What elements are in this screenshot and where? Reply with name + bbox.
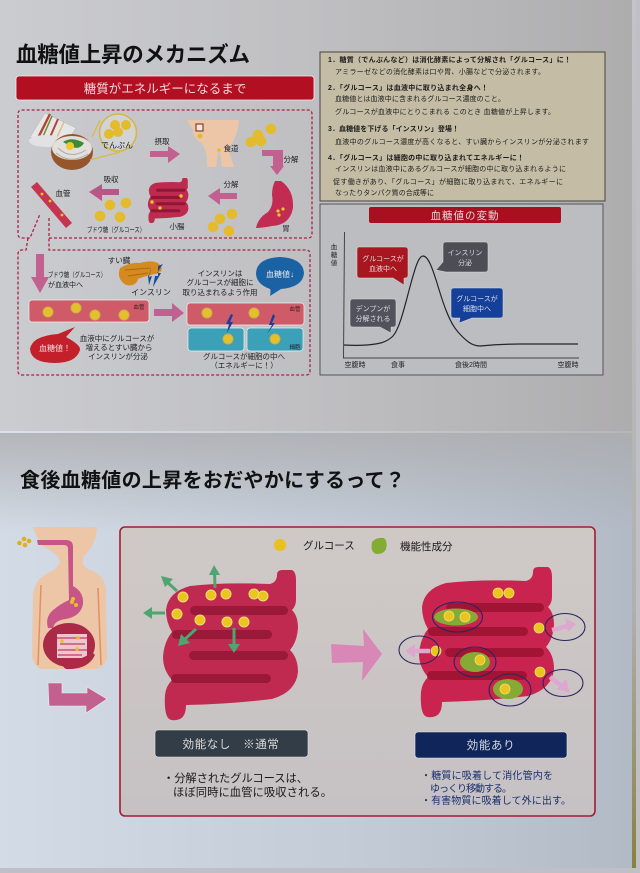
diagram: without effect bbox=[143, 565, 298, 720]
text: no effect description: ・分解されたグルコースは、 bbox=[163, 771, 308, 785]
text: insulin function: 取り込まれるよう作用 bbox=[182, 287, 258, 297]
blood vessel: right bbox=[187, 303, 304, 325]
text: insulin secretion: インスリンが分泌 bbox=[88, 351, 148, 361]
blood vessel: left: 血管 bbox=[133, 303, 145, 311]
legend bbox=[274, 538, 453, 554]
heading bar: sugar to energy bbox=[16, 76, 314, 100]
text: glucose enters cell: （エネルギーに！） bbox=[210, 361, 278, 370]
text: insulin function: インスリンは bbox=[198, 269, 243, 278]
icon: stomach bbox=[256, 181, 293, 233]
text: effect description: ・有害物質に吸着して外に出す。 bbox=[421, 794, 571, 807]
heading bar: sugar to energy: 糖質がエネルギーになるまで bbox=[84, 81, 246, 96]
legend: グルコース bbox=[303, 539, 355, 552]
panel: mechanism comparison bbox=[120, 527, 595, 816]
label: effective bbox=[415, 732, 567, 758]
x axis labels: 空腹時 bbox=[558, 360, 578, 369]
callout: blood sugar up bbox=[30, 327, 80, 363]
icon: body with digestive organs bbox=[32, 527, 107, 669]
text: effect description: ・糖質に吸着して消化管内を bbox=[421, 769, 553, 782]
pink excretion arrows bbox=[412, 626, 570, 688]
chart heading: 血糖値の変動 bbox=[430, 209, 500, 222]
callout: glucose into cells: 細胞中へ bbox=[463, 304, 491, 313]
callout: insulin secretion: 分泌 bbox=[458, 258, 472, 267]
label: glucose: ブドウ糖（グルコース） bbox=[87, 225, 145, 234]
callout: starch breakdown bbox=[350, 299, 396, 333]
label: effective: 効能あり bbox=[467, 738, 515, 752]
legend: 機能性成分 bbox=[400, 540, 453, 553]
text: no effect description: ほぼ同時に血管に吸収される。 bbox=[173, 785, 332, 799]
arrow: ingestion: 摂取 bbox=[154, 136, 170, 146]
x axis labels: 食事 bbox=[391, 360, 405, 369]
arrow: absorption bbox=[89, 175, 119, 201]
callout: glucose into blood bbox=[357, 247, 408, 285]
arrow: breakdown to small intestine: 分解 bbox=[224, 179, 239, 189]
icon: pancreas bbox=[108, 255, 171, 297]
panel: explanation text: 血液中のグルコース濃度が高くなると、すい臓からインスリンが分泌されます bbox=[335, 137, 589, 146]
text: insulin secretion bbox=[80, 333, 155, 361]
text: glucose enters blood: ブドウ糖（グルコース） bbox=[48, 270, 106, 279]
glucose dots bbox=[431, 588, 545, 694]
icon: small intestine: 小腸 bbox=[170, 222, 185, 231]
arrow: bent to main panel bbox=[48, 683, 107, 713]
arrow: comparison bbox=[331, 629, 382, 681]
blood vessel: right: 血管 bbox=[289, 305, 301, 313]
diagram: with effect bbox=[399, 567, 585, 717]
panel: explanation text: アミラーゼなどの消化酵素は口や胃、小腸などで分泌されます。 bbox=[335, 67, 545, 76]
panel: explanation text: 4．「グルコース」は細胞の中に取り込まれてエネルギーに！ bbox=[328, 153, 524, 162]
chart axes bbox=[344, 232, 579, 358]
text: glucose enters blood bbox=[48, 270, 106, 289]
panel: explanation text: 3．血糖値を下げる「インスリン」登場！ bbox=[328, 124, 459, 133]
glucose dots: starch bbox=[246, 124, 276, 147]
panel: insulin action bbox=[18, 238, 310, 375]
callout: insulin secretion bbox=[436, 242, 488, 272]
icon: pancreas: すい臓 bbox=[108, 255, 131, 265]
functional ingredient blobs bbox=[434, 608, 523, 699]
glucose dots: maltose bbox=[208, 209, 237, 236]
panel: explanation text: 2．「グルコース」は血液中に取り込まれ全身へ！ bbox=[328, 83, 488, 92]
icon: intestine left bbox=[163, 570, 298, 720]
x axis labels: 食後2時間 bbox=[455, 360, 487, 369]
text: insulin function: グルコースが細胞に bbox=[187, 277, 253, 287]
icon: blood vessel bbox=[31, 182, 72, 228]
icon: mouth and esophagus bbox=[187, 120, 239, 167]
text: glucose enters cell: グルコースが細胞の中へ bbox=[203, 351, 285, 361]
callout: glucose into cells bbox=[451, 288, 503, 323]
highlight ellipses bbox=[399, 602, 585, 706]
arrow: breakdown to stomach: 分解 bbox=[284, 154, 299, 164]
icon: starch circle bbox=[90, 114, 136, 160]
panel: explanation text bbox=[320, 52, 605, 201]
panel: explanation text: グルコースが血液中にとりこまれる このとき 血糖値が上昇します。 bbox=[335, 107, 555, 116]
icon: intestine right bbox=[419, 567, 554, 717]
icon: insulin bolts bbox=[226, 314, 275, 334]
section title: 食後血糖値の上昇をおだやかにするって？ bbox=[20, 469, 405, 492]
text: effect description bbox=[421, 769, 571, 807]
glucose dots bbox=[172, 589, 268, 627]
text: glucose enters blood: が血液中へ bbox=[48, 280, 83, 289]
callout: glucose into blood: グルコースが bbox=[362, 254, 404, 263]
arrow: to right vessel bbox=[154, 303, 184, 322]
arrow: absorption: 吸収 bbox=[104, 175, 119, 184]
y axis label: 値 bbox=[331, 258, 338, 267]
callout: blood sugar down bbox=[256, 257, 304, 296]
x axis labels bbox=[344, 360, 578, 369]
panel: digestion flow bbox=[18, 110, 312, 238]
arrow: ingestion bbox=[150, 136, 180, 163]
panel: explanation text: 1．糖質（でんぷんなど）は消化酵素によって分解され「グルコース」に！ bbox=[328, 55, 571, 64]
callout: starch breakdown: デンプンが bbox=[356, 304, 390, 313]
arrow: into blood bbox=[31, 254, 49, 293]
text: effect description: ゆっくり移動する。 bbox=[430, 782, 512, 795]
cells bbox=[188, 328, 303, 351]
green absorption arrows bbox=[149, 570, 234, 647]
arrow: breakdown to small intestine bbox=[208, 179, 239, 205]
icon: sandwich and noodle bowl bbox=[29, 113, 93, 170]
x axis labels: 空腹時 bbox=[344, 360, 366, 369]
panel: explanation text: 促す働きがあり、「グルコース」が細胞に取り込まれて、エネルギーに bbox=[333, 177, 563, 186]
y axis label: 糖 bbox=[331, 250, 338, 259]
cells: 細胞 bbox=[289, 343, 301, 351]
callout: blood sugar down: 血糖値↓ bbox=[266, 269, 294, 279]
text: insulin secretion: 血液中にグルコースが bbox=[80, 333, 155, 343]
y axis label bbox=[331, 242, 338, 267]
label: no effect: 効能なし ※通常 bbox=[183, 737, 279, 751]
panel: explanation text: なったりタンパク質の合成等に bbox=[335, 188, 434, 197]
icon: starch circle: でんぷん bbox=[101, 141, 133, 150]
label: no effect bbox=[155, 730, 308, 757]
callout: glucose into blood: 血液中へ bbox=[369, 264, 397, 273]
arrow: breakdown to stomach bbox=[262, 150, 299, 175]
callout: blood sugar up: 血糖値！ bbox=[39, 343, 71, 353]
glucose dots: glucose bbox=[95, 198, 131, 222]
text: no effect description bbox=[163, 771, 332, 799]
panel: explanation text: インスリンは血液中にあるグルコースが細胞の中に取り込まれるように bbox=[335, 164, 566, 173]
text: glucose enters cell bbox=[203, 351, 285, 370]
callout: glucose into cells: グルコースが bbox=[456, 294, 498, 303]
title: 血糖値上昇のメカニズム bbox=[16, 42, 250, 67]
text: insulin secretion: 増えるとすい臓から bbox=[85, 342, 153, 352]
icon: food particles bbox=[17, 537, 31, 547]
callout: insulin secretion: インスリン bbox=[448, 249, 482, 257]
icon: pancreas: インスリン bbox=[131, 288, 171, 297]
icon: blood vessel: 血管 bbox=[56, 188, 71, 198]
callout: starch breakdown: 分解される bbox=[356, 314, 390, 323]
blood vessel: left bbox=[29, 300, 149, 322]
panel: blood sugar chart bbox=[320, 204, 603, 375]
chart heading bbox=[369, 207, 561, 223]
icon: mouth and esophagus: 食道 bbox=[224, 143, 239, 153]
icon: small intestine bbox=[148, 178, 188, 231]
y axis label: 血 bbox=[331, 242, 338, 251]
text: insulin function bbox=[182, 269, 258, 297]
icon: stomach: 胃 bbox=[282, 224, 290, 233]
panel: explanation text: 血糖値とは血液中に含まれるグルコース濃度のこと。 bbox=[335, 94, 505, 103]
chart curve bbox=[344, 256, 578, 346]
